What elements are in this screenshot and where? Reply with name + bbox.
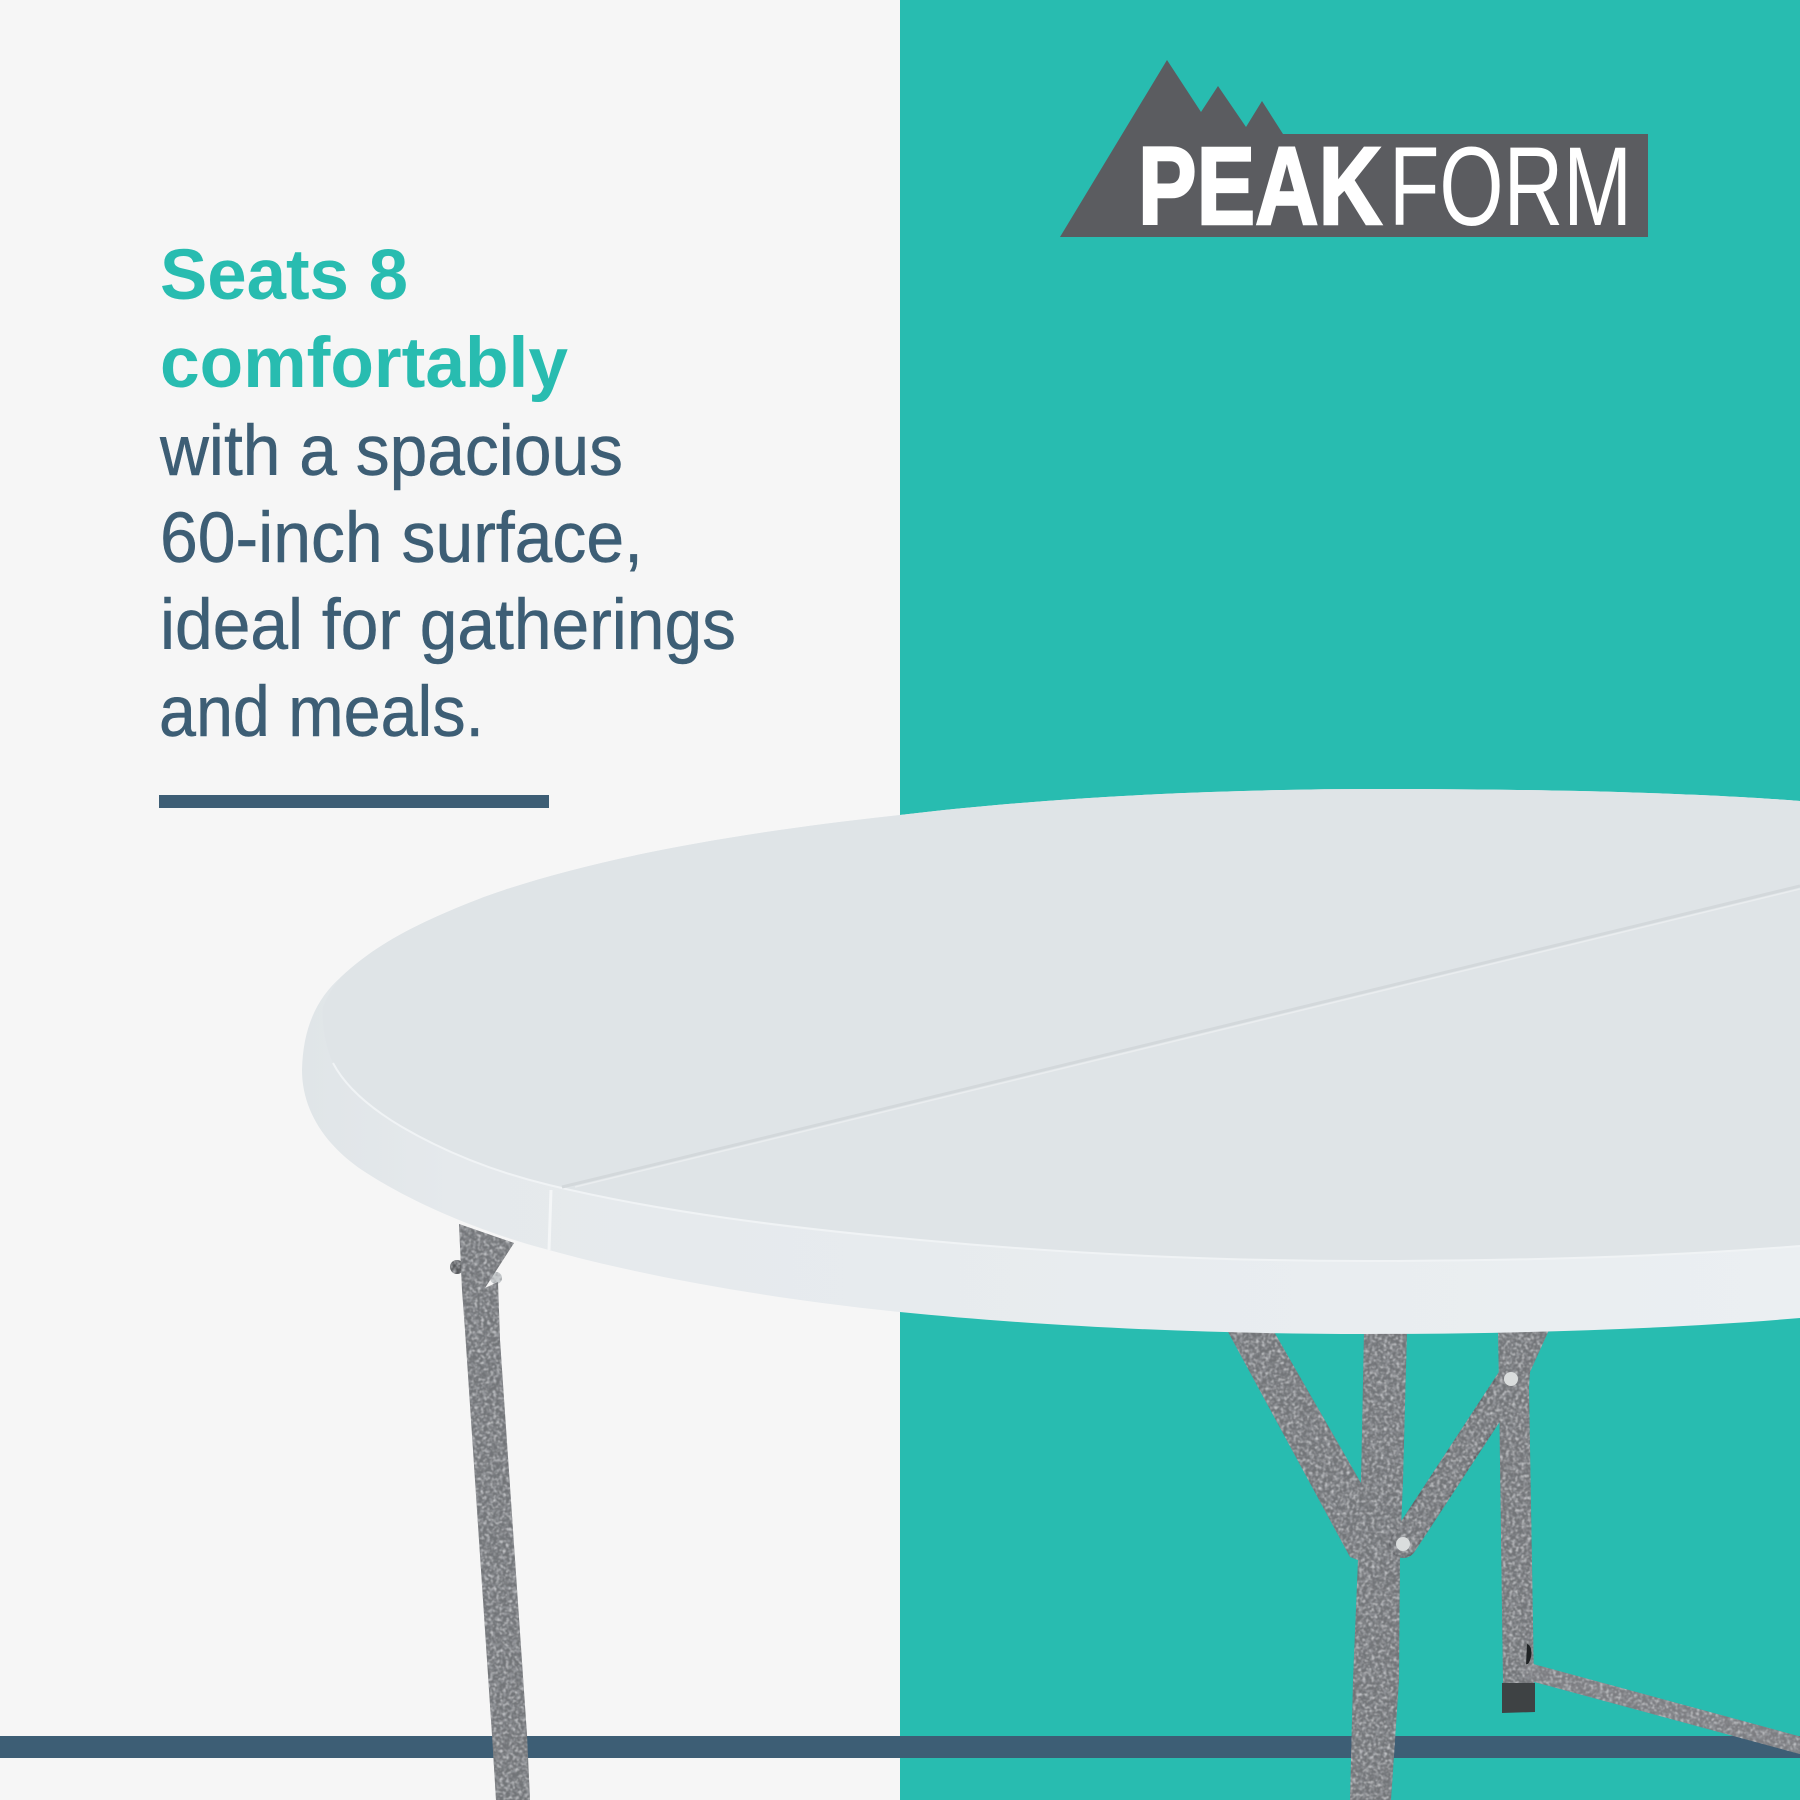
heading: [160, 236, 569, 403]
body copy: [159, 412, 736, 752]
center table leg with braces: [1227, 1330, 1511, 1800]
logo wordmark light: FORM: [1389, 124, 1632, 249]
left table leg: [450, 1224, 530, 1800]
heading: Seats 8: [160, 236, 408, 315]
text block: seating description: [159, 236, 736, 752]
logo: Peakform: [1060, 60, 1648, 249]
table illustration: [302, 789, 1800, 1800]
table top surface: [323, 789, 1800, 1261]
panel: teal right background: [900, 0, 1800, 1800]
body copy: and meals.: [159, 673, 484, 752]
table lip highlight: [333, 1063, 1800, 1261]
text underline rule: [159, 795, 549, 808]
heading: comfortably: [160, 324, 569, 403]
rear table leg with crossbar: [1498, 1330, 1800, 1748]
brace over rear leg: [1480, 1379, 1511, 1426]
bottom accent bar: [0, 1736, 1800, 1758]
body copy: 60-inch surface,: [160, 499, 643, 578]
crossbar: [1530, 1672, 1800, 1748]
body copy: with a spacious: [159, 412, 623, 491]
table fold seam: [549, 886, 1800, 1250]
table rim: [302, 789, 1800, 1334]
logo wordmark bold: PEAK: [1138, 125, 1382, 248]
body copy: ideal for gatherings: [160, 586, 736, 665]
panel: light left background: [0, 0, 900, 1800]
rubber foot: [1502, 1683, 1535, 1713]
logo mountain badge: [1060, 60, 1648, 237]
hinge bolts: [1396, 1372, 1518, 1551]
